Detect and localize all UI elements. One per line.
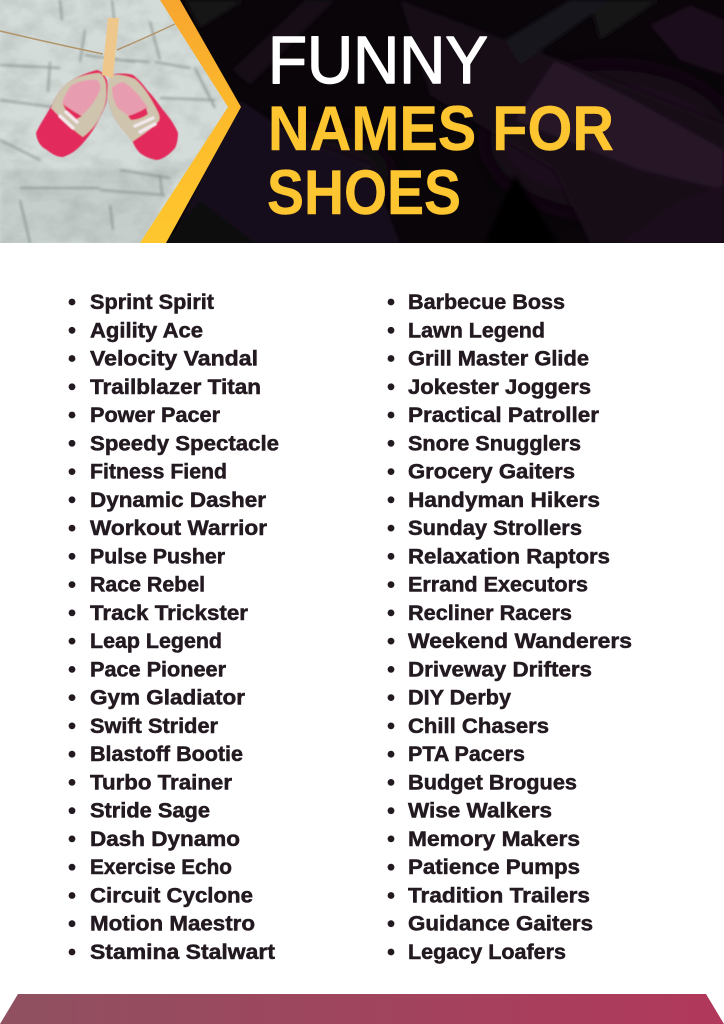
list: right column: PTA Pacers <box>408 743 525 766</box>
list: left column: Leap Legend <box>90 630 222 653</box>
list: right column: Recliner Racers <box>408 602 572 625</box>
title <box>268 36 614 215</box>
list: right column: DIY Derby <box>408 687 511 710</box>
list: left column: Pace Pioneer <box>90 658 226 681</box>
title line: SHOES: SHOES <box>267 158 461 228</box>
list: right column: Grill Master Glide <box>408 348 589 370</box>
list: right column: Snore Snugglers <box>408 432 581 455</box>
list: left column: Agility Ace <box>90 319 203 342</box>
list: right column: Practical Patroller <box>408 404 599 427</box>
list: left column: Power Pacer <box>90 404 220 427</box>
list: right column: Patience Pumps <box>408 856 580 879</box>
header banner <box>0 0 724 243</box>
list: left column: Pulse Pusher <box>90 545 225 568</box>
list: left column: Track Trickster <box>90 602 248 625</box>
dark geometric background <box>150 0 724 243</box>
list: left column: Swift Strider <box>90 715 218 738</box>
list: right column <box>388 291 632 964</box>
title line: NAMES FOR: NAMES FOR <box>268 94 614 164</box>
list: right column: Relaxation Raptors <box>408 545 610 568</box>
list: left column <box>69 291 279 964</box>
list: left column: Velocity Vandal <box>90 348 258 370</box>
list: right column: Memory Makers <box>408 828 580 851</box>
right shoe <box>108 74 178 160</box>
list: left column: Race Rebel <box>90 574 205 597</box>
list: left column: Trailblazer Titan <box>90 376 261 399</box>
clothespin <box>102 18 119 78</box>
list: left column: Dynamic Dasher <box>90 489 266 512</box>
list: right column: Driveway Drifters <box>408 658 592 681</box>
list: right column: Guidance Gaiters <box>408 913 593 936</box>
list: right column: Weekend Wanderers <box>408 630 632 653</box>
list: left column: Gym Gladiator <box>90 687 245 710</box>
list: right column: Budget Brogues <box>408 771 577 794</box>
list: right column: Grocery Gaiters <box>408 461 575 484</box>
footer band <box>0 994 724 1024</box>
list: left column: Dash Dynamo <box>90 828 240 851</box>
list: right column: Wise Walkers <box>408 800 552 823</box>
left shoe <box>36 70 108 157</box>
icon: baby shoes on a clothesline <box>0 18 178 160</box>
list: left column: Sprint Spirit <box>90 291 214 314</box>
list: left column: Fitness Fiend <box>90 461 227 484</box>
list: right column: Chill Chasers <box>408 715 549 738</box>
list: left column: Turbo Trainer <box>90 771 232 794</box>
list: right column: Legacy Loafers <box>408 941 566 964</box>
list: right column: Sunday Strollers <box>408 517 582 540</box>
list: left column: Workout Warrior <box>90 517 267 540</box>
list: left column: Motion Maestro <box>90 913 255 936</box>
list: right column: Jokester Joggers <box>408 376 591 399</box>
list: right column: Handyman Hikers <box>408 489 600 512</box>
list: right column: Tradition Trailers <box>408 884 590 908</box>
list: left column: Exercise Echo <box>90 856 232 879</box>
gold chevron <box>140 0 241 243</box>
title line: FUNNY: FUNNY <box>268 23 488 98</box>
photo: brick wall <box>0 0 232 243</box>
list: right column: Errand Executors <box>408 574 588 597</box>
list: right column: Barbecue Boss <box>408 291 565 314</box>
list: left column: Speedy Spectacle <box>90 432 279 455</box>
list: left column: Blastoff Bootie <box>90 743 243 766</box>
rope <box>0 24 175 54</box>
list: left column: Stamina Stalwart <box>90 941 275 964</box>
list: right column: Lawn Legend <box>408 319 545 342</box>
list: left column: Stride Sage <box>90 800 210 823</box>
list: left column: Circuit Cyclone <box>90 884 253 908</box>
